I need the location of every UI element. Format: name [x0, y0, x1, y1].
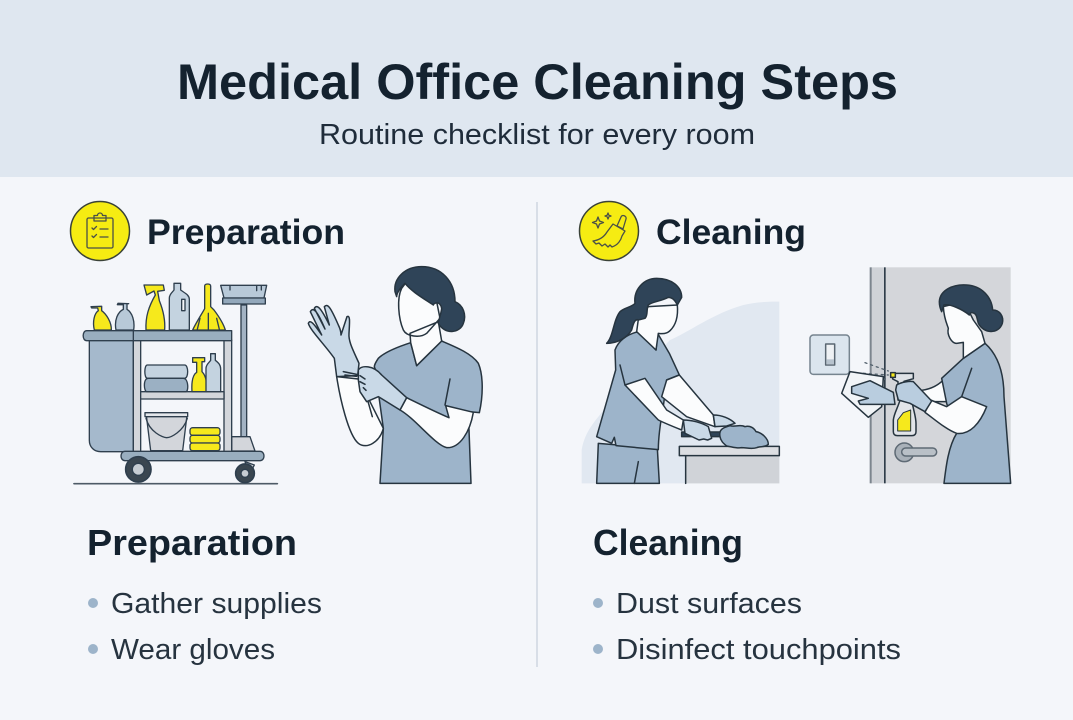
heading: cleaning: Cleaning: [656, 213, 806, 252]
spray bottle: [891, 373, 916, 436]
far glove: [713, 415, 735, 427]
neck and face: [399, 282, 442, 366]
illustration: cleaning cart: [74, 283, 277, 484]
section title: preparation: Preparation: [87, 522, 297, 563]
cart bin: [89, 340, 133, 452]
raised glove: [308, 306, 359, 377]
panel: cleaning: [580, 202, 1011, 666]
forearm: [400, 398, 473, 448]
duster: [682, 426, 768, 448]
heading: preparation: Preparation: [147, 213, 345, 252]
bucket: [145, 413, 188, 451]
list: preparation steps: Wear gloves: [111, 634, 275, 666]
far arm: [918, 380, 948, 402]
cloth: [842, 372, 883, 417]
illustration: disinfecting touchpoints: [810, 267, 1011, 483]
panel: preparation: [70, 202, 482, 666]
near glove: [683, 420, 712, 440]
neck and face: [943, 303, 985, 358]
broom on pole: [221, 285, 267, 451]
top bottles: [91, 283, 225, 330]
list: preparation steps: Gather supplies: [111, 588, 322, 620]
background shape: [582, 302, 779, 483]
icon: clipboard checklist: [70, 202, 130, 260]
floor line: [74, 481, 277, 486]
scrub top: [942, 343, 1011, 483]
raised arm: [337, 377, 383, 446]
spray droplets: [863, 363, 888, 382]
base shelf: [121, 451, 264, 461]
wall switch: [810, 335, 849, 374]
pulling hand: [358, 367, 407, 410]
list: preparation steps: [88, 588, 322, 666]
hair: [395, 267, 465, 331]
yellow towels: [190, 428, 220, 451]
list: cleaning steps: Dust surfaces: [616, 588, 802, 620]
forearm: [925, 397, 987, 433]
scrub top: [374, 341, 482, 483]
illustration: nurse putting on gloves: [308, 267, 482, 483]
section title: cleaning: Cleaning: [593, 522, 743, 563]
list: cleaning steps: Disinfect touchpoints: [616, 634, 901, 666]
folded towels and bottles: [144, 354, 221, 392]
middle shelf: [141, 392, 224, 399]
hair: [607, 278, 682, 343]
title: Medical Office Cleaning Steps: [177, 54, 898, 110]
list: cleaning steps: [593, 588, 901, 666]
scrub top: [597, 332, 679, 450]
header band: [0, 0, 1073, 177]
top shelf: [83, 331, 232, 341]
icon: broom with sparkles: [580, 202, 638, 260]
near arm: [625, 378, 683, 430]
hair: [939, 285, 1003, 331]
trousers: [597, 443, 659, 483]
cart uprights: [133, 340, 232, 452]
door and frame: [870, 267, 1011, 483]
subtitle: Routine checklist for every room: [319, 119, 755, 151]
illustration: dusting a counter: [582, 278, 779, 483]
far arm: [662, 375, 715, 427]
wheels: [126, 457, 254, 483]
gloved hands: [896, 381, 932, 412]
door handle: [895, 443, 937, 462]
counter: [679, 446, 779, 483]
neck and face: [637, 305, 678, 350]
